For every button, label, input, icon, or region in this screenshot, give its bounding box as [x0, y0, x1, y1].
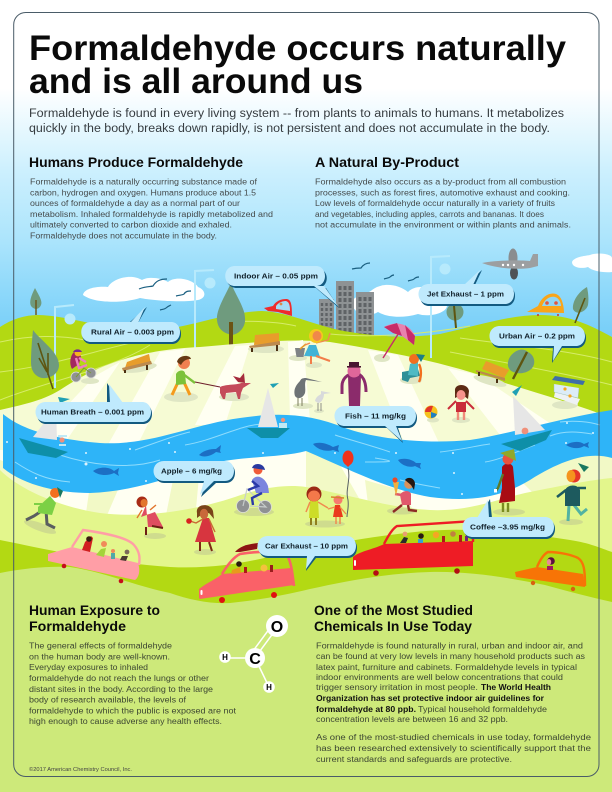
- clouds: [83, 254, 612, 317]
- text: most studied: indoor environments are well below concentrations that could: [316, 673, 563, 682]
- callout: indoor air: Indoor Air – 0.05 ppm: [234, 272, 318, 280]
- text: natural by-product: Formaldehyde also occurs as a by-product from all combustion: [315, 178, 566, 186]
- sailboat right: [501, 385, 552, 451]
- orange car: [515, 552, 585, 591]
- girl with apple: [186, 505, 216, 555]
- intro text: quickly in the body, breaks down rapidly, is not persistent and does not accumulate in the body.: [29, 123, 550, 135]
- text: humans produce: Formaldehyde does not accumulate in the body.: [30, 232, 217, 240]
- coral car: [199, 543, 294, 603]
- callout: human breath: [36, 383, 152, 424]
- seated person: [400, 354, 425, 384]
- main title: and is all around us: [29, 61, 363, 101]
- cream land: [0, 341, 612, 510]
- balloon: [342, 450, 354, 517]
- text: human exposure: [29, 642, 237, 726]
- text: most studied: [316, 642, 592, 764]
- callout: car exhaust: [258, 536, 357, 571]
- gull: [314, 391, 331, 413]
- birds: [139, 263, 419, 310]
- text: most studied: Typical household formaldehyde: [418, 705, 548, 714]
- band wedges: [0, 450, 612, 520]
- text: human exposure: on the human body are well-known.: [29, 652, 170, 662]
- text: most studied: trigger sensory irritation in most people.: [316, 683, 478, 692]
- text: most studied: concentration levels are between 16 and 32 ppb.: [316, 715, 508, 724]
- teal runner: [557, 463, 589, 525]
- river highlights: [15, 421, 600, 488]
- text: human exposure: The general effects of formaldehyde: [29, 642, 173, 650]
- benches: [122, 333, 509, 389]
- person with coffee: [493, 449, 525, 516]
- callout: car exhaust: Car Exhaust – 10 ppm: [265, 542, 348, 550]
- callout: jet exhaust: Jet Exhaust – 1 ppm: [427, 290, 504, 298]
- cyclist on path: [70, 349, 99, 384]
- text: most studied: As one of the most-studied chemicals in use today, formaldehyde: [316, 733, 592, 742]
- girl in red: [448, 385, 474, 423]
- copyright: ©2017 American Chemistry Council, Inc.: [29, 766, 132, 773]
- text: humans produce: [30, 178, 273, 240]
- text: humans produce: metabolism. Inhaled formaldehyde is rapidly metabolized and: [30, 210, 273, 219]
- text: most studied: latex paint, furniture and cabinets. Formaldehyde levels in typical: [316, 663, 577, 672]
- text: human exposure: formaldehyde to which the public is exposed are not: [29, 706, 237, 716]
- hills: [0, 311, 612, 560]
- callout: human breath: Human Breath – 0.001 ppm: [41, 408, 144, 416]
- text: natural by-product: [315, 178, 571, 230]
- heading: most studied: [314, 602, 473, 634]
- blue cyclist: [234, 464, 274, 516]
- text: human exposure: Everyday exposures to inhaled: [29, 663, 148, 672]
- girl dancing: [136, 496, 166, 539]
- text: humans produce: Formaldehyde is a naturally occurring substance made of: [30, 178, 258, 186]
- lower land: [0, 470, 612, 620]
- intro text: [29, 108, 564, 135]
- ice cream cart: [552, 376, 585, 409]
- bucket: [289, 344, 307, 361]
- light rays: [25, 340, 560, 450]
- beach umbrella: [374, 323, 415, 362]
- beach ball: [424, 406, 439, 422]
- fish: [93, 442, 589, 476]
- callout: rural air: [81, 307, 181, 344]
- text: most studied: has been researched extensively to scientifically support that the: [316, 744, 592, 753]
- red car: [353, 521, 473, 576]
- text: natural by-product: not accumulate in the environment or within plants and animals.: [315, 221, 571, 230]
- main title: Formaldehyde occurs naturally: [29, 28, 566, 68]
- molecule diagram: H: [266, 683, 272, 692]
- heading: human exposure: Formaldehyde: [29, 618, 126, 634]
- text: most studied: Organization has set protective indoor air guidelines for: [316, 694, 544, 703]
- text: most studied: Formaldehyde is found naturally in rural, urban and indoor air, and: [316, 642, 583, 650]
- river sparkles: [6, 422, 594, 495]
- callout: coffee: Coffee –3.95 mg/kg: [470, 522, 545, 532]
- callout: jet exhaust: [418, 270, 515, 306]
- running man: [23, 487, 63, 537]
- sailboat left: [19, 397, 70, 458]
- text: humans produce: carbon, hydrogen and oxygen. Humans produce about 1.5: [30, 188, 257, 197]
- text: most studied: formaldehyde at 80 ppb.: [316, 705, 416, 714]
- heading: human exposure: [29, 602, 160, 634]
- background sky: [0, 0, 612, 340]
- text: natural by-product: Low levels of formaldehyde occur naturally in a variety of fruits: [315, 199, 555, 208]
- man walking dog: [164, 356, 220, 402]
- molecule diagram: C: [249, 651, 261, 668]
- person with ice cream: [387, 477, 417, 514]
- orange van on hill: [527, 294, 564, 316]
- lower green band: [0, 530, 612, 620]
- heading: humans produce: Humans Produce Formaldehyde: [29, 154, 243, 170]
- callout: urban air: [490, 326, 586, 363]
- text: most studied: can be found at very low levels in many household products such as: [316, 652, 585, 661]
- heading: most studied: Chemicals In Use Today: [314, 618, 472, 634]
- text: natural by-product: and vegetables, including apples, carrots and bananas. It does: [315, 210, 544, 219]
- text: humans produce: ounces of formaldehyde a day as a normal part of our: [30, 199, 240, 208]
- heron: [293, 378, 322, 409]
- text: humans produce: ultimately converted to carbon dioxide and exhaled.: [30, 221, 232, 230]
- molecule diagram: [219, 615, 288, 693]
- white band below river: [0, 450, 612, 520]
- callout: rural air: Rural Air – 0.003 ppm: [91, 328, 174, 336]
- text: most studied: The World Health: [481, 683, 551, 692]
- main title: [29, 28, 566, 101]
- red car on hill: [264, 299, 292, 316]
- text: human exposure: formaldehyde do not reach the lungs or other: [29, 674, 209, 683]
- man in hat: [342, 362, 366, 406]
- adult and child: [305, 486, 346, 528]
- text: natural by-product: processes, such as forest fires, automotive exhaust and cooking.: [315, 188, 570, 197]
- pink car: [48, 530, 139, 583]
- street lamps: [55, 256, 450, 388]
- hill highlights: [0, 321, 612, 400]
- heading: human exposure: Human Exposure to: [29, 602, 160, 618]
- callout: urban air: Urban Air – 0.2 ppm: [499, 332, 575, 340]
- molecule diagram: O: [271, 619, 283, 636]
- text: human exposure: body of research available, the levels of: [29, 696, 187, 705]
- callout: fish: [334, 406, 417, 443]
- callout: apple: Apple – 6 mg/kg: [161, 466, 222, 476]
- callout: indoor air: [225, 266, 339, 308]
- heading: most studied: One of the Most Studied: [314, 602, 473, 618]
- buildings: [319, 281, 374, 338]
- callout: fish: Fish – 11 mg/kg: [345, 412, 406, 420]
- sailboat center: [247, 383, 290, 438]
- river: [3, 410, 612, 499]
- dog: [219, 373, 251, 401]
- intro text: Formaldehyde is found in every living system -- from plants to animals to humans. It metabolizes: [29, 108, 564, 120]
- text: most studied: current standards and safeguards are protective.: [316, 755, 512, 764]
- text: human exposure: high enough to cause adverse any health effects.: [29, 717, 222, 726]
- callout: apple: [154, 461, 235, 497]
- callout: coffee: [462, 499, 555, 539]
- trees: [30, 283, 588, 389]
- molecule diagram: H: [222, 653, 228, 662]
- blonde girl: [304, 329, 330, 368]
- heading: natural by-product: A Natural By-Product: [315, 154, 459, 170]
- bottom panel background: [0, 567, 612, 792]
- airplane: [482, 248, 538, 280]
- text: human exposure: distant sites in the body. According to the large: [29, 685, 214, 694]
